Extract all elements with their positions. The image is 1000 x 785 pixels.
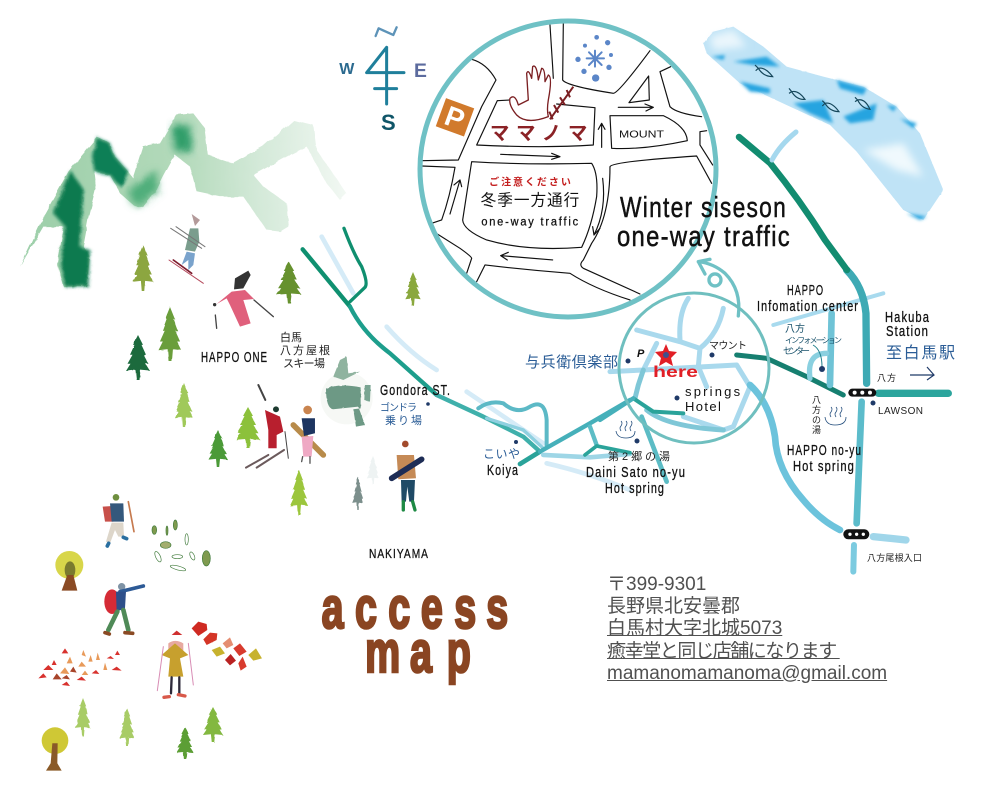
Koiya label: Koiya bbox=[487, 462, 519, 479]
road network bbox=[303, 132, 948, 572]
Happo no-yu hot spring label: 八 bbox=[812, 395, 821, 405]
Gondola station label: 乗り場 bbox=[385, 414, 422, 427]
Koiya label bbox=[483, 440, 520, 479]
Hakuba station label bbox=[870, 309, 955, 417]
Hakuba Happo-one ski area label: 白馬 bbox=[280, 330, 302, 344]
Hakuba Happo-one ski area label: スキー場 bbox=[283, 357, 325, 370]
icon: snowflake bbox=[575, 35, 613, 82]
snowboarder with pink trousers bbox=[293, 406, 323, 463]
Happo information center label bbox=[757, 282, 859, 372]
gondola car bbox=[321, 357, 373, 427]
river with fish bbox=[703, 27, 943, 220]
Hakuba Happo-one ski area label: 八方屋根 bbox=[280, 343, 330, 357]
skier in red bbox=[246, 385, 288, 468]
winter notice heading bbox=[617, 192, 791, 253]
skier in pink bbox=[213, 271, 273, 328]
Happo no-yu hot spring label bbox=[787, 395, 862, 475]
icon: parking sign: P bbox=[441, 100, 469, 136]
town labels bbox=[525, 340, 747, 414]
Happo no-yu hot spring label: の bbox=[812, 415, 821, 425]
compass rose bbox=[339, 27, 427, 135]
yellow tree lower bbox=[42, 727, 68, 771]
red and orange autumn ground leaves bbox=[38, 648, 122, 686]
town labels: Hotel bbox=[685, 399, 722, 414]
snowboarder with navy board bbox=[392, 441, 422, 510]
town labels: P bbox=[637, 348, 645, 360]
winter notice heading: one-way traffic bbox=[617, 221, 791, 253]
Happo information center label: HAPPO bbox=[787, 282, 824, 299]
hiker with trekking poles bbox=[157, 631, 193, 697]
Happo information center label: 八方 bbox=[785, 322, 805, 335]
town labels: 与兵衛倶楽部 bbox=[525, 354, 618, 371]
Happo information center label: インフォメーション bbox=[785, 336, 842, 345]
trees in the autumn area bbox=[75, 698, 223, 759]
icon: parking sign bbox=[435, 98, 474, 137]
here marker bbox=[653, 344, 698, 381]
scattered green leaves bbox=[152, 520, 210, 572]
shop name: ママノマ bbox=[490, 123, 587, 144]
Daini Sato no-yu hot spring label: 第2郷の湯 bbox=[608, 449, 670, 463]
Happo One label: HAPPO ONE bbox=[201, 349, 268, 366]
skier in grey bbox=[169, 214, 205, 283]
address block: 〒399-9301 bbox=[607, 574, 706, 595]
town circle bbox=[619, 293, 769, 443]
one-way notice: 冬季一方通行 bbox=[481, 192, 579, 210]
one-way notice: ご注意ください bbox=[489, 176, 571, 189]
compass rose: E bbox=[414, 61, 427, 82]
address block: mamanomamanoma@gmail.com bbox=[607, 663, 887, 684]
road junction signals bbox=[843, 389, 876, 539]
access map title: access bbox=[322, 575, 508, 641]
Daini Sato no-yu hot spring label: Hot spring bbox=[605, 480, 665, 497]
Happo no-yu hot spring label: HAPPO no-yu bbox=[787, 442, 862, 459]
Hakuba station label: 至白馬駅 bbox=[886, 344, 955, 362]
maple leaf cluster bbox=[192, 622, 262, 671]
winter notice heading: Winter siseson bbox=[620, 192, 787, 224]
yellow tree upper bbox=[55, 551, 83, 591]
inset map of one-way streets bbox=[422, 23, 713, 300]
trees on the ski slope bbox=[126, 245, 421, 515]
icon: hand and branch bbox=[510, 66, 573, 120]
inset circle frame bbox=[420, 21, 716, 317]
access map title bbox=[322, 575, 508, 685]
address block bbox=[607, 574, 888, 684]
town and station roads bbox=[600, 270, 948, 572]
Nakiyama label: NAKIYAMA bbox=[369, 546, 429, 561]
Hakuba station label: 八方 bbox=[877, 372, 896, 383]
access map title: map bbox=[365, 619, 471, 685]
Koiya label: こいや bbox=[483, 447, 520, 461]
Gondola station label bbox=[380, 382, 451, 427]
mountain watercolor bbox=[20, 113, 347, 287]
Happo information center label: Infomation center bbox=[757, 298, 859, 315]
Happo no-yu hot spring label: 湯 bbox=[812, 425, 821, 435]
road north to river bbox=[739, 137, 847, 270]
Happo no-yu hot spring label: 方 bbox=[812, 404, 821, 415]
compass rose: S bbox=[381, 110, 396, 135]
hiker with walking stick bbox=[103, 494, 134, 546]
compass rose: W bbox=[339, 61, 355, 78]
Hakuba station label: Station bbox=[886, 323, 929, 340]
main road to Koiya bbox=[303, 228, 630, 464]
address block: 長野県北安曇郡 bbox=[607, 596, 740, 617]
Daini Sato no-yu hot spring label: Daini Sato no-yu bbox=[586, 464, 686, 481]
Hakuba Happo-one ski area label bbox=[280, 330, 330, 370]
address block: 癒幸堂と同じ店舗になります bbox=[607, 641, 836, 662]
Happo no-yu hot spring label: Hot spring bbox=[793, 458, 855, 475]
hiker pointing with red pack bbox=[104, 583, 143, 634]
one-way notice: one-way traffic bbox=[481, 215, 580, 229]
town labels: springs bbox=[685, 384, 742, 399]
pale parallel strokes bbox=[322, 237, 630, 490]
Gondola station label: Gondora ST. bbox=[380, 382, 451, 399]
here marker: here bbox=[653, 364, 698, 381]
Daini Sato no-yu hot spring label bbox=[586, 421, 686, 497]
address block: 白馬村大字北城5073 bbox=[607, 618, 782, 639]
arrow from town to inset bbox=[698, 259, 739, 316]
Happo information center label: センター bbox=[783, 346, 810, 356]
Hakuba station label: Hakuba bbox=[885, 309, 930, 326]
Hakuba station label: LAWSON bbox=[878, 406, 923, 417]
one-way notice bbox=[481, 176, 580, 229]
town labels: マウント bbox=[709, 340, 747, 352]
Happo-one entrance label: 八方尾根入口 bbox=[867, 552, 922, 563]
street outlines bbox=[422, 23, 713, 300]
shop label MOUNT: MOUNT bbox=[619, 129, 664, 140]
Gondola station label: ゴンドラ bbox=[380, 401, 417, 414]
